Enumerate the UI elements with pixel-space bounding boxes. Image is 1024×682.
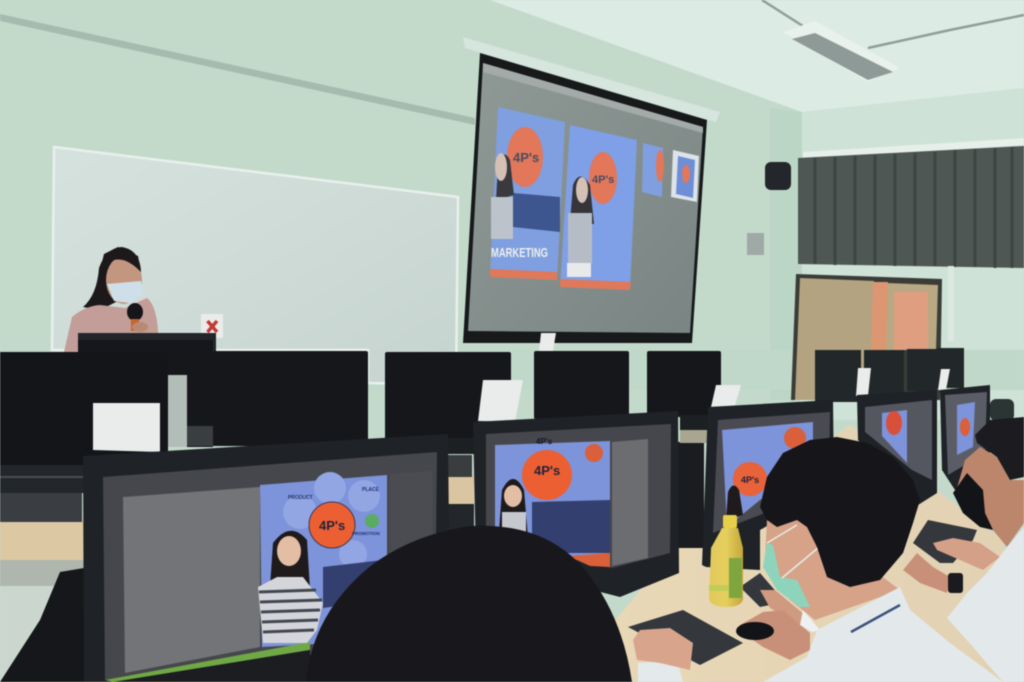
projected poster left: MARKETING [491, 245, 548, 260]
student right [903, 417, 1024, 682]
chair [0, 568, 84, 682]
projected thumbnails [642, 143, 699, 202]
projected poster right [560, 125, 637, 290]
projected poster right: 4P's [592, 174, 614, 186]
ceiling [0, 0, 1024, 160]
front right monitors: 4P's [741, 475, 759, 485]
wall pipe [948, 266, 954, 341]
front right monitors [702, 385, 990, 570]
window blinds [798, 146, 1024, 268]
front left monitor: 4P's [319, 518, 345, 533]
front left monitor: PROMOTION [352, 531, 380, 536]
front left monitor: PRODUCT [288, 495, 313, 501]
presenter [64, 247, 158, 352]
projected poster left [490, 107, 565, 280]
front center monitor: 4P's [536, 437, 553, 446]
desk right [612, 425, 1024, 682]
whiteboard [52, 147, 458, 385]
ceiling light [783, 21, 900, 82]
water bottle [709, 515, 743, 607]
front center monitor: 4P's [534, 463, 560, 478]
red x sign [201, 314, 223, 338]
projector screen [463, 37, 720, 343]
speaker [765, 162, 791, 190]
keyboards [628, 520, 977, 665]
front left monitor: PLACE [362, 487, 380, 493]
paper name cards [478, 333, 950, 422]
left monitor [0, 352, 472, 522]
door [791, 274, 942, 400]
front head [306, 526, 632, 682]
front center monitor [473, 411, 679, 597]
front left monitor [83, 434, 450, 682]
back monitor row [78, 333, 1014, 454]
left desk [0, 476, 474, 682]
student center [633, 437, 1003, 682]
woman on screen [258, 531, 323, 643]
projected poster left: 4P's [513, 150, 539, 165]
wall socket box [747, 233, 764, 255]
